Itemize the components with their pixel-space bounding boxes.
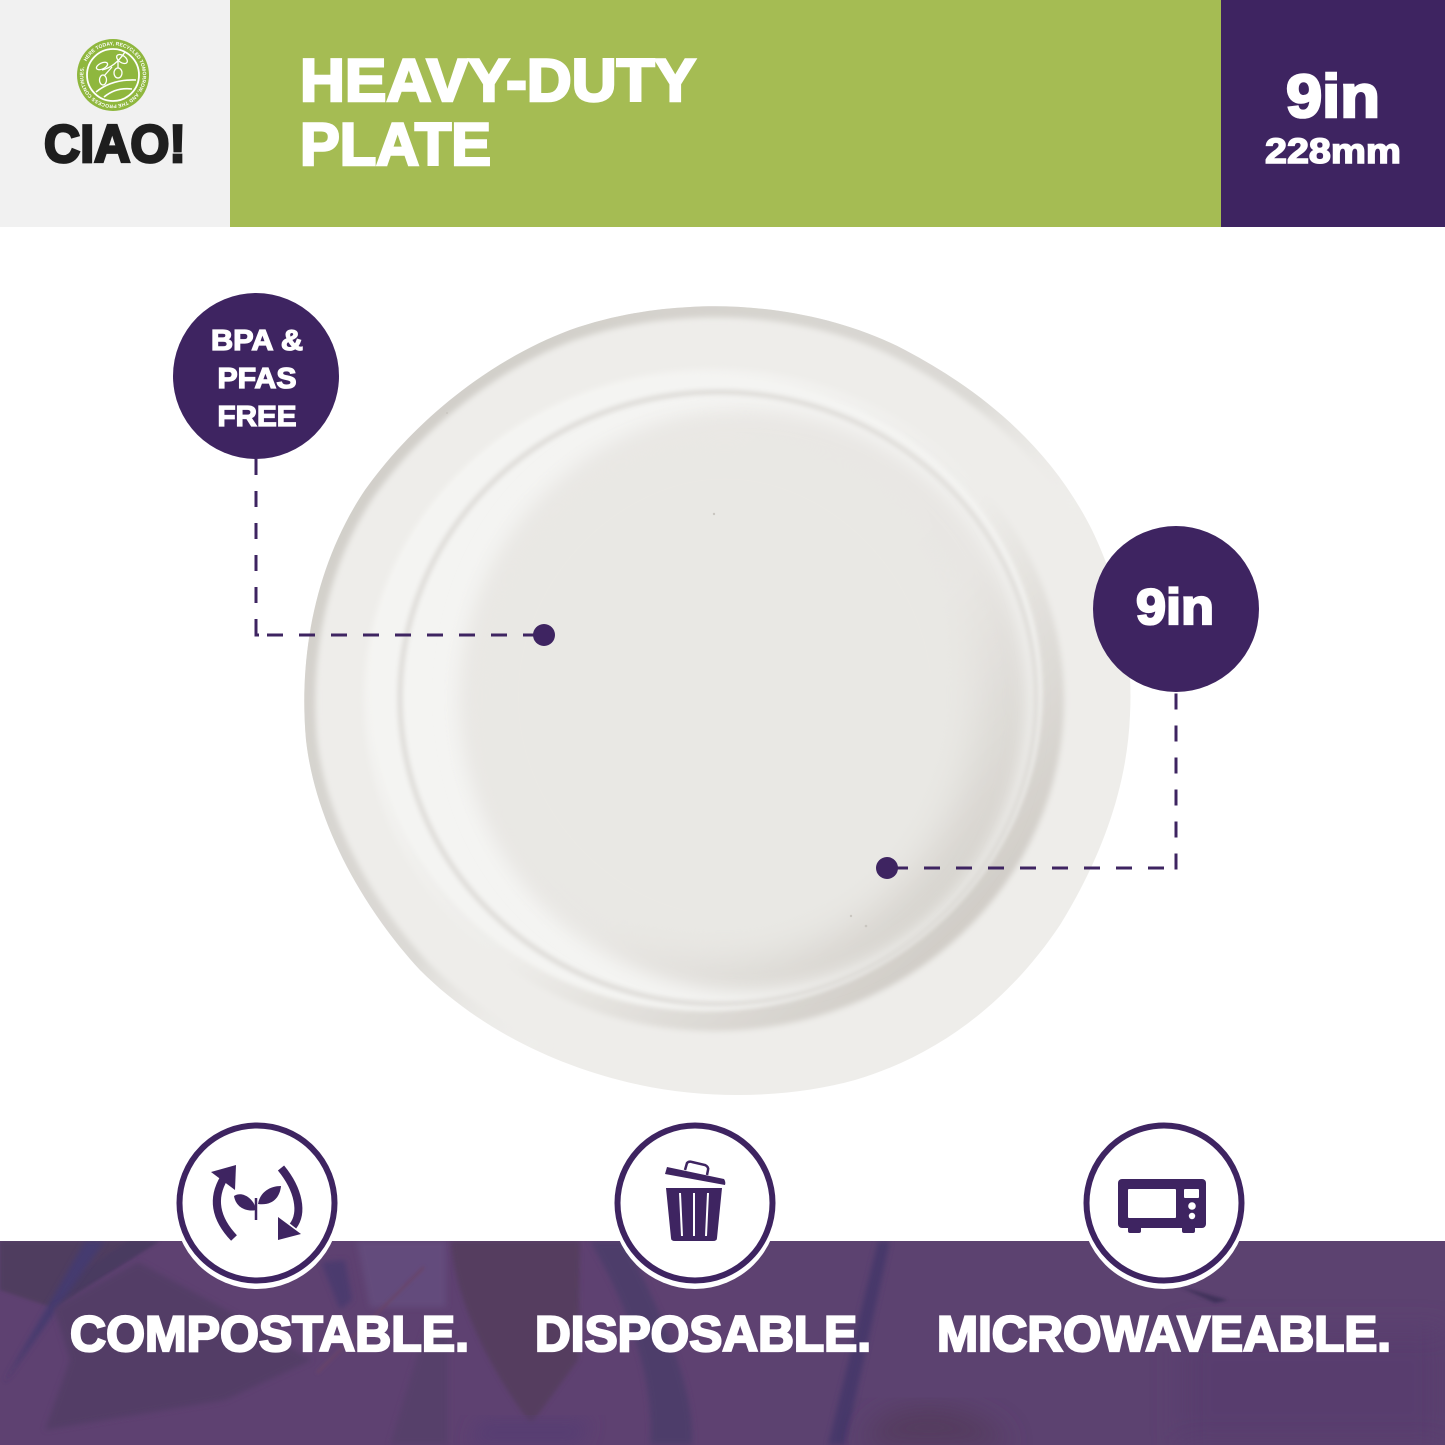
badge text: BPA &: [211, 325, 303, 357]
badge text: PFAS: [218, 363, 296, 395]
dashed leader line: [887, 690, 1176, 870]
plate ridge: [370, 375, 1042, 1011]
plate groove: [400, 392, 1036, 1004]
icon: disposable: [612, 1123, 778, 1289]
icon: compostable: [174, 1123, 340, 1289]
dashed leader line: [254, 458, 544, 635]
icon: microwaveable: [1081, 1123, 1247, 1289]
size text: [1265, 63, 1401, 171]
size text: 228mm: [1265, 132, 1401, 171]
banner leaf background: [0, 1241, 1226, 1445]
plate well: [475, 435, 975, 959]
callout: 9in diameter: [876, 526, 1259, 879]
plate outer rim: [304, 306, 1130, 1095]
label: compostable: COMPOSTABLE.: [70, 1306, 469, 1362]
plate edge shading: [304, 306, 1016, 998]
plate well shadow: [461, 410, 1029, 990]
microwave body: [1118, 1179, 1206, 1228]
bottom banner: [0, 1241, 1445, 1445]
label: microwaveable: MICROWAVEABLE.: [937, 1306, 1391, 1362]
badge text: FREE: [218, 401, 296, 433]
plate: [304, 306, 1130, 1095]
logo wordmark: CIAO!: [44, 115, 186, 174]
title text: HEAVY-DUTY: [300, 47, 696, 114]
icon: round green logo badge: HERE TODAY, RECYCLED TOMORROW, AND THE PROCESS CONTINUES.: [80, 42, 146, 108]
plate speckles: [446, 412, 867, 927]
badge text: 9in: [1136, 579, 1214, 635]
marker dot: [533, 624, 555, 646]
size text: 9in: [1286, 63, 1380, 130]
microwave feet: [1128, 1226, 1195, 1233]
trash lid: [665, 1167, 725, 1185]
badge circle: [1093, 526, 1259, 692]
callout: BPA and PFAS free: [173, 293, 555, 646]
title band: [230, 0, 1221, 227]
trash can body: [666, 1188, 722, 1241]
label: disposable: DISPOSABLE.: [535, 1306, 871, 1362]
plate outer ridge shade: [364, 369, 1064, 1031]
logo panel: [0, 0, 230, 227]
title text: PLATE: [300, 111, 491, 178]
badge circle: [173, 293, 339, 459]
marker dot: [876, 857, 898, 879]
badge text: [211, 325, 303, 433]
title text: [300, 47, 696, 178]
size panel: [1221, 0, 1445, 227]
